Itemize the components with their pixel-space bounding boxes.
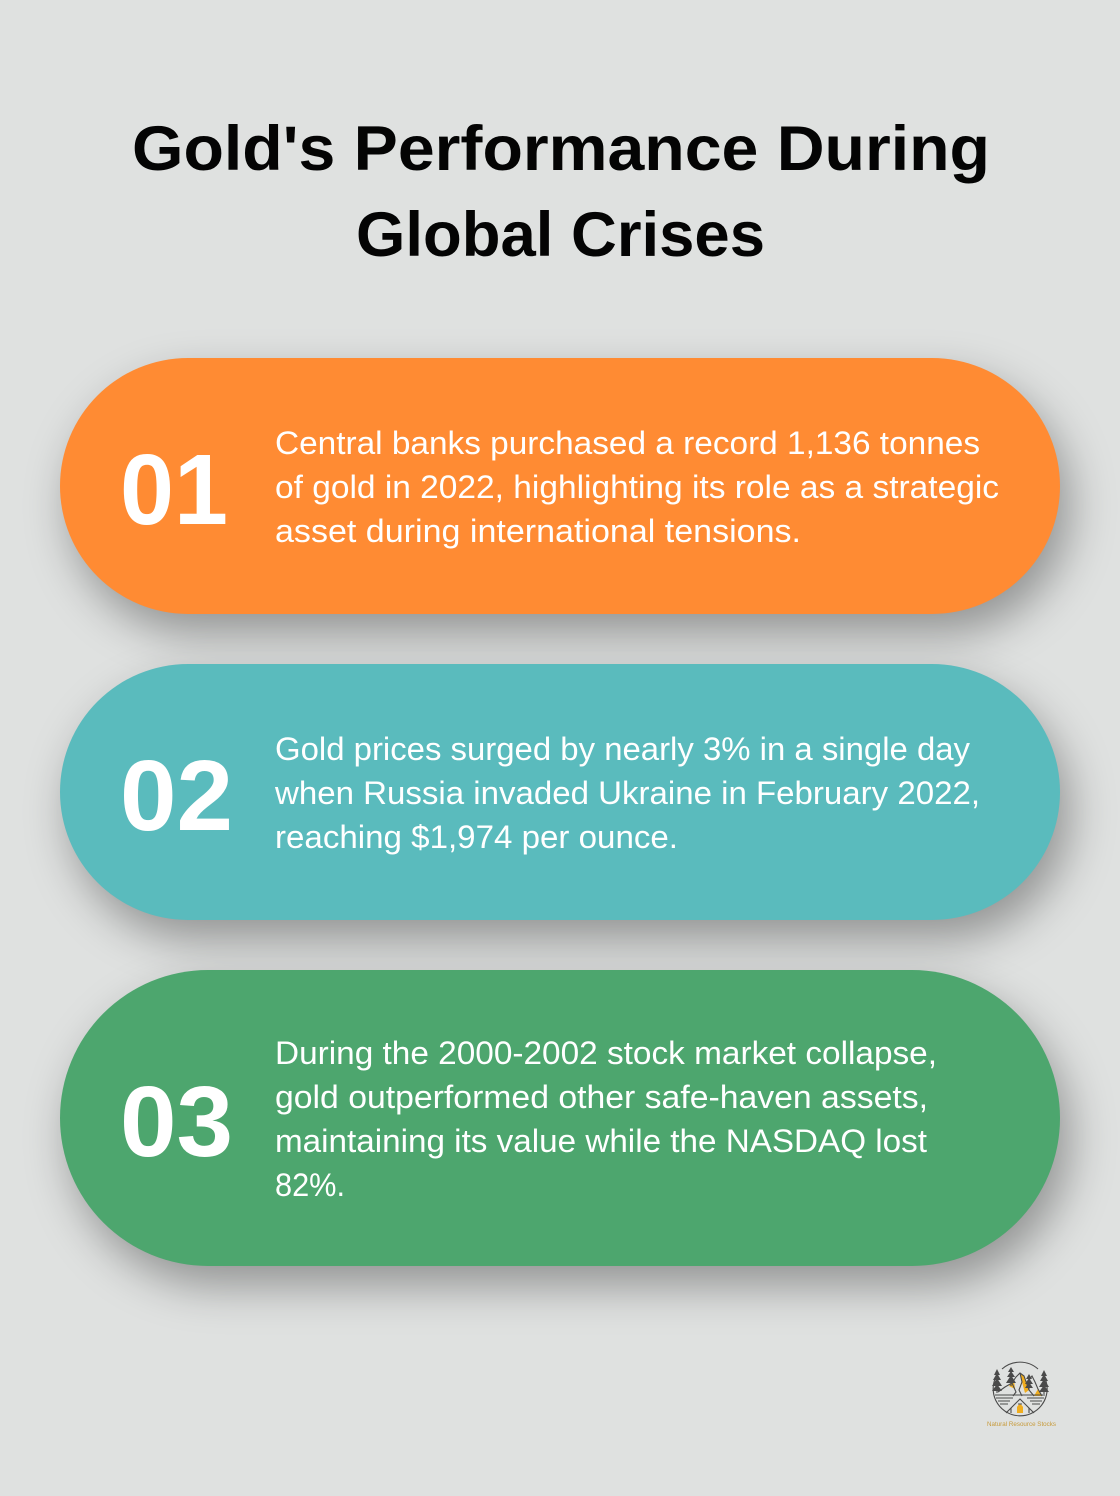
panel: card 02 teal pill [60,664,1060,920]
icon: gold accents [1009,1373,1042,1413]
logo: Natural Resource Stocks [987,1362,1057,1428]
panel: card 01 orange pill [60,358,1060,614]
number 03: 03 [120,1066,233,1178]
title [132,114,990,270]
text block: card 02: reaching $1,974 per ounce. [275,819,678,855]
text block: card 01 [275,425,999,549]
text block: card 01: Central banks purchased a record 1,136 tonnes [275,425,980,461]
number 02: 02 [120,740,233,852]
title: Gold's Performance During [132,114,990,184]
text block: card 03 [275,1035,937,1203]
text block: card 03: gold outperformed other safe-haven assets, [275,1079,928,1115]
icon: circular badge with trees, mountains and cabin [993,1362,1047,1416]
text block: card 03: 82%. [275,1167,345,1203]
icon: pine trees [992,1367,1049,1392]
number 01: 01 [120,434,228,546]
text block: card 02: when Russia invaded Ukraine in February 2022, [274,775,980,811]
panel: card 03 green pill [60,970,1060,1266]
text block: card 03: During the 2000-2002 stock market collapse, [275,1035,937,1071]
text block: card 02: Gold prices surged by nearly 3% in a single day [275,731,970,767]
logo caption: Natural Resource Stocks [987,1421,1057,1428]
text block: card 03: maintaining its value while the NASDAQ lost [275,1123,927,1159]
text block: card 01: of gold in 2022, highlighting its role as a strategic [275,469,999,505]
text block: card 02 [274,731,980,855]
title: Global Crises [356,200,765,270]
text block: card 01: asset during international tensions. [275,513,801,549]
